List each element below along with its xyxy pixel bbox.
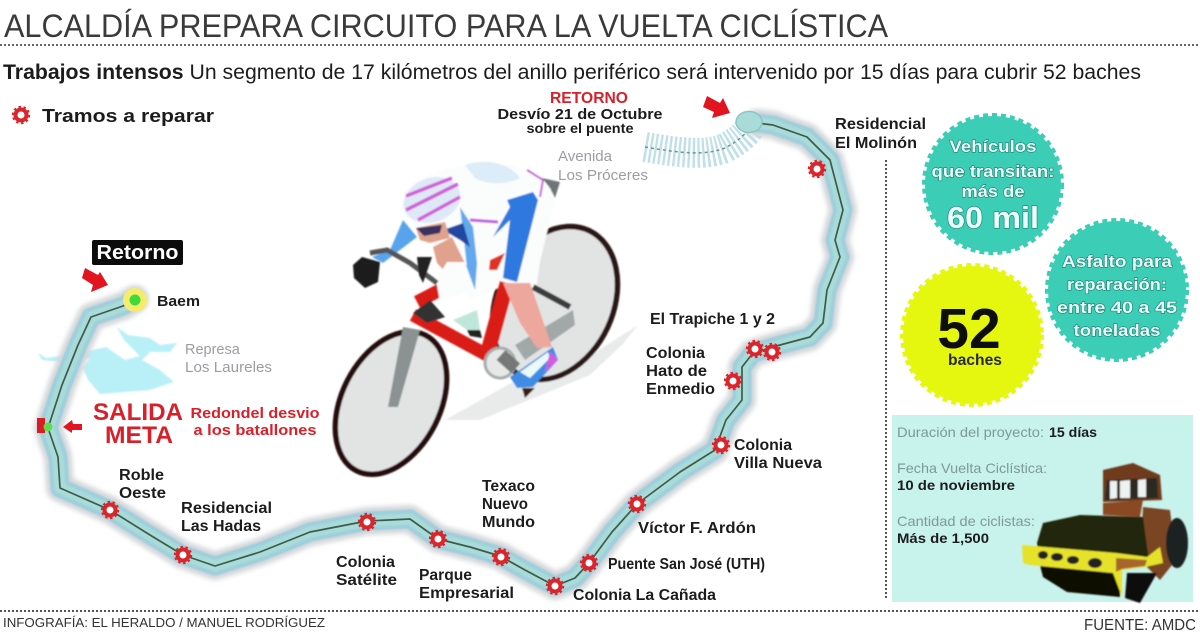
rider blue shorts and arms [493, 192, 538, 282]
place labels: Roble [119, 467, 164, 484]
place labels: Víctor F. Ardón [638, 520, 756, 537]
circle: vehiculos: Vehículos [950, 137, 1036, 156]
return loop [736, 112, 762, 132]
reservoir: Represa Los Laureles [38, 327, 272, 394]
frame [413, 276, 507, 355]
place labels [119, 116, 926, 604]
front wheel [313, 313, 469, 493]
arrow: salida [63, 420, 82, 433]
circle: 52 baches: baches [948, 352, 1002, 369]
label: salida meta: META [105, 422, 173, 449]
label: salida meta [93, 399, 183, 449]
place labels: Hato de [646, 363, 707, 380]
credit: INFOGRAFÍA: EL HERALDO / MANUEL RODRÍGUEZ [3, 615, 325, 630]
circle: vehiculos: 60 mil [947, 200, 1039, 235]
retorno marker: Baem: Baem [157, 293, 200, 310]
route: road circuit [48, 123, 843, 586]
place labels: Villa Nueva [734, 455, 822, 472]
circle: asfalto: entre 40 a 45 [1057, 298, 1177, 317]
place labels: Puente San José (UTH) [608, 556, 765, 573]
bottom divider [0, 610, 1200, 612]
place labels: Satélite [336, 572, 397, 589]
rear wheel [469, 206, 641, 400]
circle: asfalto: Asfalto para [1062, 252, 1173, 271]
place labels: Enmedio [646, 381, 715, 398]
label: salida meta: SALIDA [93, 399, 183, 426]
reservoir: Represa Los Laureles: Los Laureles [185, 360, 272, 376]
subtitle: Trabajos intensos Un segmento de 17 kilómetros del anillo periférico será intervenido por 15 días para cubrir 52 baches [3, 61, 1141, 84]
place labels: Mundo [482, 514, 535, 531]
divider [885, 160, 887, 600]
icon: road roller [1022, 463, 1188, 603]
jersey body [400, 164, 556, 300]
bridge overpass: Avenida Los Próceres [558, 124, 752, 184]
place labels: Residencial [835, 116, 926, 133]
face and helmet [443, 223, 470, 247]
circle: asfalto [1047, 220, 1187, 360]
panel: project data: Fecha Vuelta Ciclística: [897, 460, 1047, 476]
drive train [485, 348, 520, 378]
start marker [37, 418, 52, 433]
place labels: Las Hadas [181, 518, 261, 535]
panel: project data: 10 de noviembre [897, 477, 1015, 493]
repair markers [102, 161, 825, 594]
place labels: Colonia [734, 437, 792, 454]
bridge overpass: Avenida Los Próceres: Avenida [558, 149, 613, 165]
place labels: Empresarial [419, 585, 514, 602]
circle: 52 baches: 52 [937, 297, 1001, 361]
label: redondel desvio: a los batallones [194, 422, 316, 439]
label: redondel desvio [190, 405, 320, 439]
title: ALCALDÍA PREPARA CIRCUITO PARA LA VUELTA CICLÍSTICA [4, 8, 889, 44]
panel: project data: Duración del proyecto: [897, 424, 1044, 440]
label: Retorno: Retorno [96, 242, 178, 264]
panel: project data: 15 días [1049, 424, 1097, 440]
circle: asfalto: toneladas [1074, 321, 1160, 340]
chain stay and derailleur [515, 287, 575, 360]
label: retorno desvio 21 de octubre [498, 90, 662, 136]
shadow [445, 325, 638, 420]
place labels: Texaco [482, 478, 535, 495]
source: FUENTE: AMDC [1084, 617, 1196, 634]
cyclist illustration [313, 162, 641, 493]
label: redondel desvio: Redondel desvio [190, 405, 320, 422]
panel: project data: Más de 1,500 [897, 530, 989, 546]
legend: tramos a reparar: Tramos a reparar [42, 105, 214, 126]
retorno marker: Baem [123, 288, 200, 312]
panel: project data [892, 415, 1193, 603]
circle: 52 baches [902, 265, 1042, 405]
label: retorno desvio 21 de octubre: sobre el puente [526, 120, 634, 136]
bridge overpass: Avenida Los Próceres: Los Próceres [558, 168, 648, 184]
place labels: Nuevo [482, 496, 528, 513]
place labels: Oeste [119, 485, 166, 502]
circle: vehiculos [924, 115, 1062, 253]
place labels: Colonia [646, 345, 705, 362]
place labels: Residencial [181, 500, 272, 517]
place labels: Colonia La Cañada [573, 587, 716, 604]
place labels: Parque [419, 567, 472, 584]
circle: asfalto: reparación: [1067, 275, 1167, 294]
arrow: retorno right [703, 96, 730, 118]
place labels: El Trapiche 1 y 2 [650, 311, 775, 328]
fork [388, 327, 420, 407]
rider legs [503, 283, 552, 348]
arrow: retorno left [82, 268, 108, 292]
handlebars [370, 250, 437, 283]
place labels: Colonia [336, 554, 395, 571]
circle: vehiculos: más de [962, 182, 1024, 201]
place labels: El Molinón [835, 135, 917, 152]
reservoir: Represa Los Laureles: Represa [185, 342, 241, 358]
circle: vehiculos: que transitan: [932, 162, 1054, 181]
label: retorno desvio 21 de octubre: Desvío 21 de Octubre [498, 106, 662, 123]
shoes [510, 347, 558, 388]
label: retorno desvio 21 de octubre: RETORNO [550, 90, 628, 107]
panel: project data: Cantidad de ciclistas: [897, 513, 1035, 529]
